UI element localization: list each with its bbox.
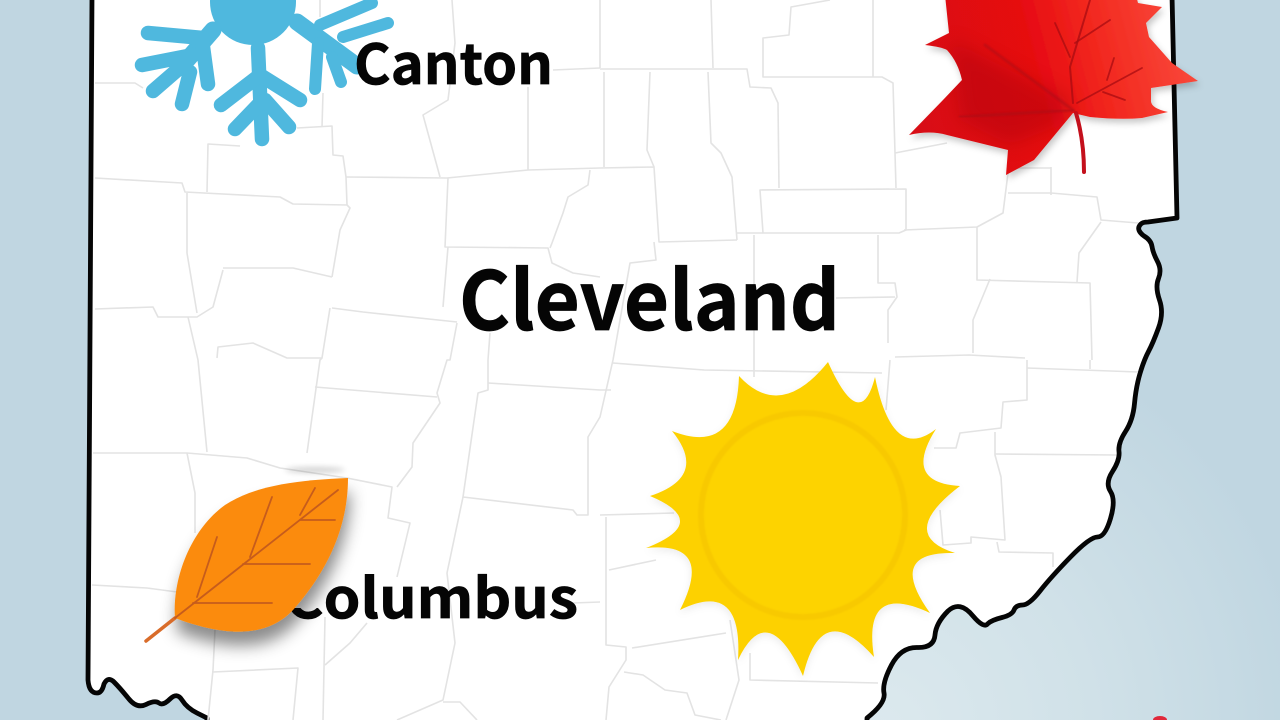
icon: red fragment at bottom edge: [1153, 716, 1167, 720]
sun disc: [701, 413, 905, 617]
icon: snowflake: [142, 0, 388, 139]
icon: maple leaf: [909, 0, 1198, 175]
mask hiding upper part of the C: [283, 566, 323, 608]
icon: sun: [646, 362, 960, 676]
label: Canton: Canton: [354, 20, 553, 100]
maple veins: [960, 0, 1142, 117]
maple shading: [950, 40, 1070, 145]
icon: orange leaf: [146, 467, 348, 641]
maple stem: [1076, 113, 1084, 172]
label: Columbus: Columbus: [285, 554, 578, 634]
leaf veins: [175, 488, 338, 618]
leaf stem: [146, 618, 175, 641]
label: Cleveland: Cleveland: [459, 237, 840, 354]
